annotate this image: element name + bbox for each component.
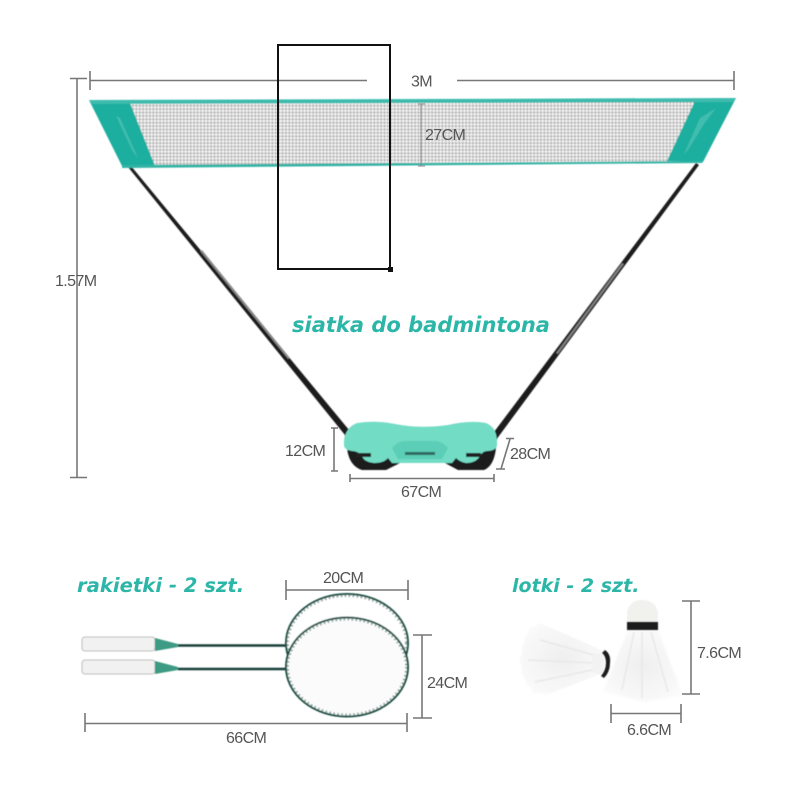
title: net: siatka do badmintona [292, 313, 550, 337]
dimension: height 1.57M [55, 78, 97, 478]
dimension: 7.6CM: 7.6CM [697, 645, 741, 662]
rackets [82, 594, 408, 716]
dimension: 28CM [496, 438, 551, 469]
dimension: 20CM [286, 570, 408, 600]
net bottom band [122, 161, 703, 168]
title: rackets: rakietki - 2 szt. [77, 574, 244, 597]
net mesh [128, 101, 696, 166]
right flap [667, 98, 736, 162]
dimension: 24CM [413, 635, 468, 718]
net base [344, 422, 497, 470]
dimension: 67CM: 67CM [401, 484, 442, 501]
poles [128, 163, 699, 440]
net assembly [89, 98, 736, 440]
dimension: 12CM: 12CM [285, 443, 326, 460]
base handle [392, 441, 448, 459]
dimension: width 3M [90, 71, 734, 90]
dimension: net height 27CM [418, 104, 466, 166]
dimension: 28CM: 28CM [510, 446, 551, 463]
black selection rectangle [278, 45, 393, 272]
title: shuttlecocks: lotki - 2 szt. [512, 575, 639, 597]
dimension: 24CM: 24CM [427, 675, 468, 692]
dimension: 66CM [85, 713, 407, 747]
base body [344, 422, 497, 463]
shuttlecocks [519, 600, 683, 702]
shuttlecock right [603, 600, 683, 702]
base wheels [347, 448, 496, 470]
dimension: 6.6CM: 6.6CM [627, 722, 671, 739]
dimension: width 3M: 3M [411, 74, 432, 90]
dimension: 6.6CM [611, 704, 681, 739]
left flap [89, 100, 155, 166]
dimension: 7.6CM [682, 601, 741, 694]
shuttlecock left [519, 623, 610, 695]
net top band [89, 98, 736, 104]
dimension: 67CM [350, 474, 494, 501]
dimension: 66CM: 66CM [226, 730, 267, 747]
racket bottom [82, 618, 408, 716]
racket top [82, 594, 408, 692]
dimension: height 1.57M: 1.57M [55, 273, 97, 290]
dimension: net height 27CM: 27CM [425, 127, 466, 144]
dimension: 20CM: 20CM [323, 570, 364, 587]
dimension: 12CM [285, 428, 338, 471]
